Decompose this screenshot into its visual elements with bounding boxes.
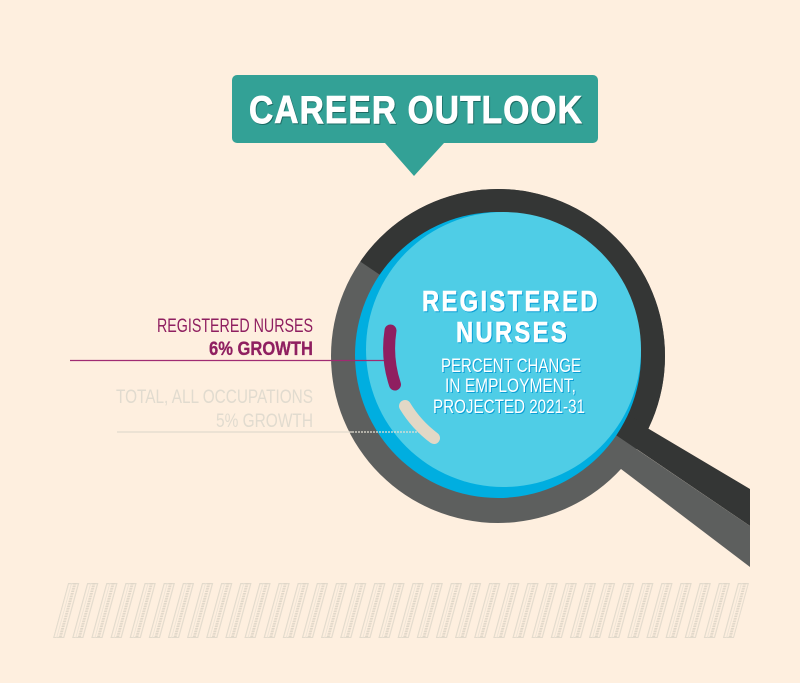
lens subheading: IN EMPLOYMENT, <box>445 376 576 397</box>
banner speech bubble <box>232 75 598 176</box>
registered nurses indicator line <box>70 360 386 362</box>
label: total occupations: TOTAL, ALL OCCUPATIONS <box>116 387 313 408</box>
lens subheading: PERCENT CHANGE <box>441 356 581 377</box>
label: registered nurses <box>157 316 313 360</box>
magnifying glass <box>331 189 750 567</box>
lens: dark blue edge <box>355 212 641 498</box>
label: registered nurses: 6% GROWTH <box>209 339 313 360</box>
lens: light blue face <box>366 212 641 487</box>
rim: grey lower part <box>331 189 665 523</box>
lens heading: NURSES <box>456 316 567 349</box>
label: registered nurses: REGISTERED NURSES <box>157 316 313 337</box>
lens heading <box>422 285 597 349</box>
handle: lower grey side <box>600 436 750 567</box>
lens subheading: PROJECTED 2021-31 <box>433 397 585 418</box>
arc: total occupations 5% <box>405 406 434 438</box>
decorative striped band <box>53 583 749 638</box>
label: total occupations: 5% GROWTH <box>216 411 313 432</box>
total occupations indicator line <box>117 431 420 433</box>
dark upper part of rim and handle <box>331 189 750 526</box>
arc: registered nurses 6% <box>389 330 395 384</box>
label: total occupations <box>116 387 313 432</box>
lens heading: REGISTERED <box>422 285 597 318</box>
banner: career outlook <box>232 75 598 176</box>
title: CAREER OUTLOOK <box>249 88 582 132</box>
lens subheading <box>433 356 585 418</box>
